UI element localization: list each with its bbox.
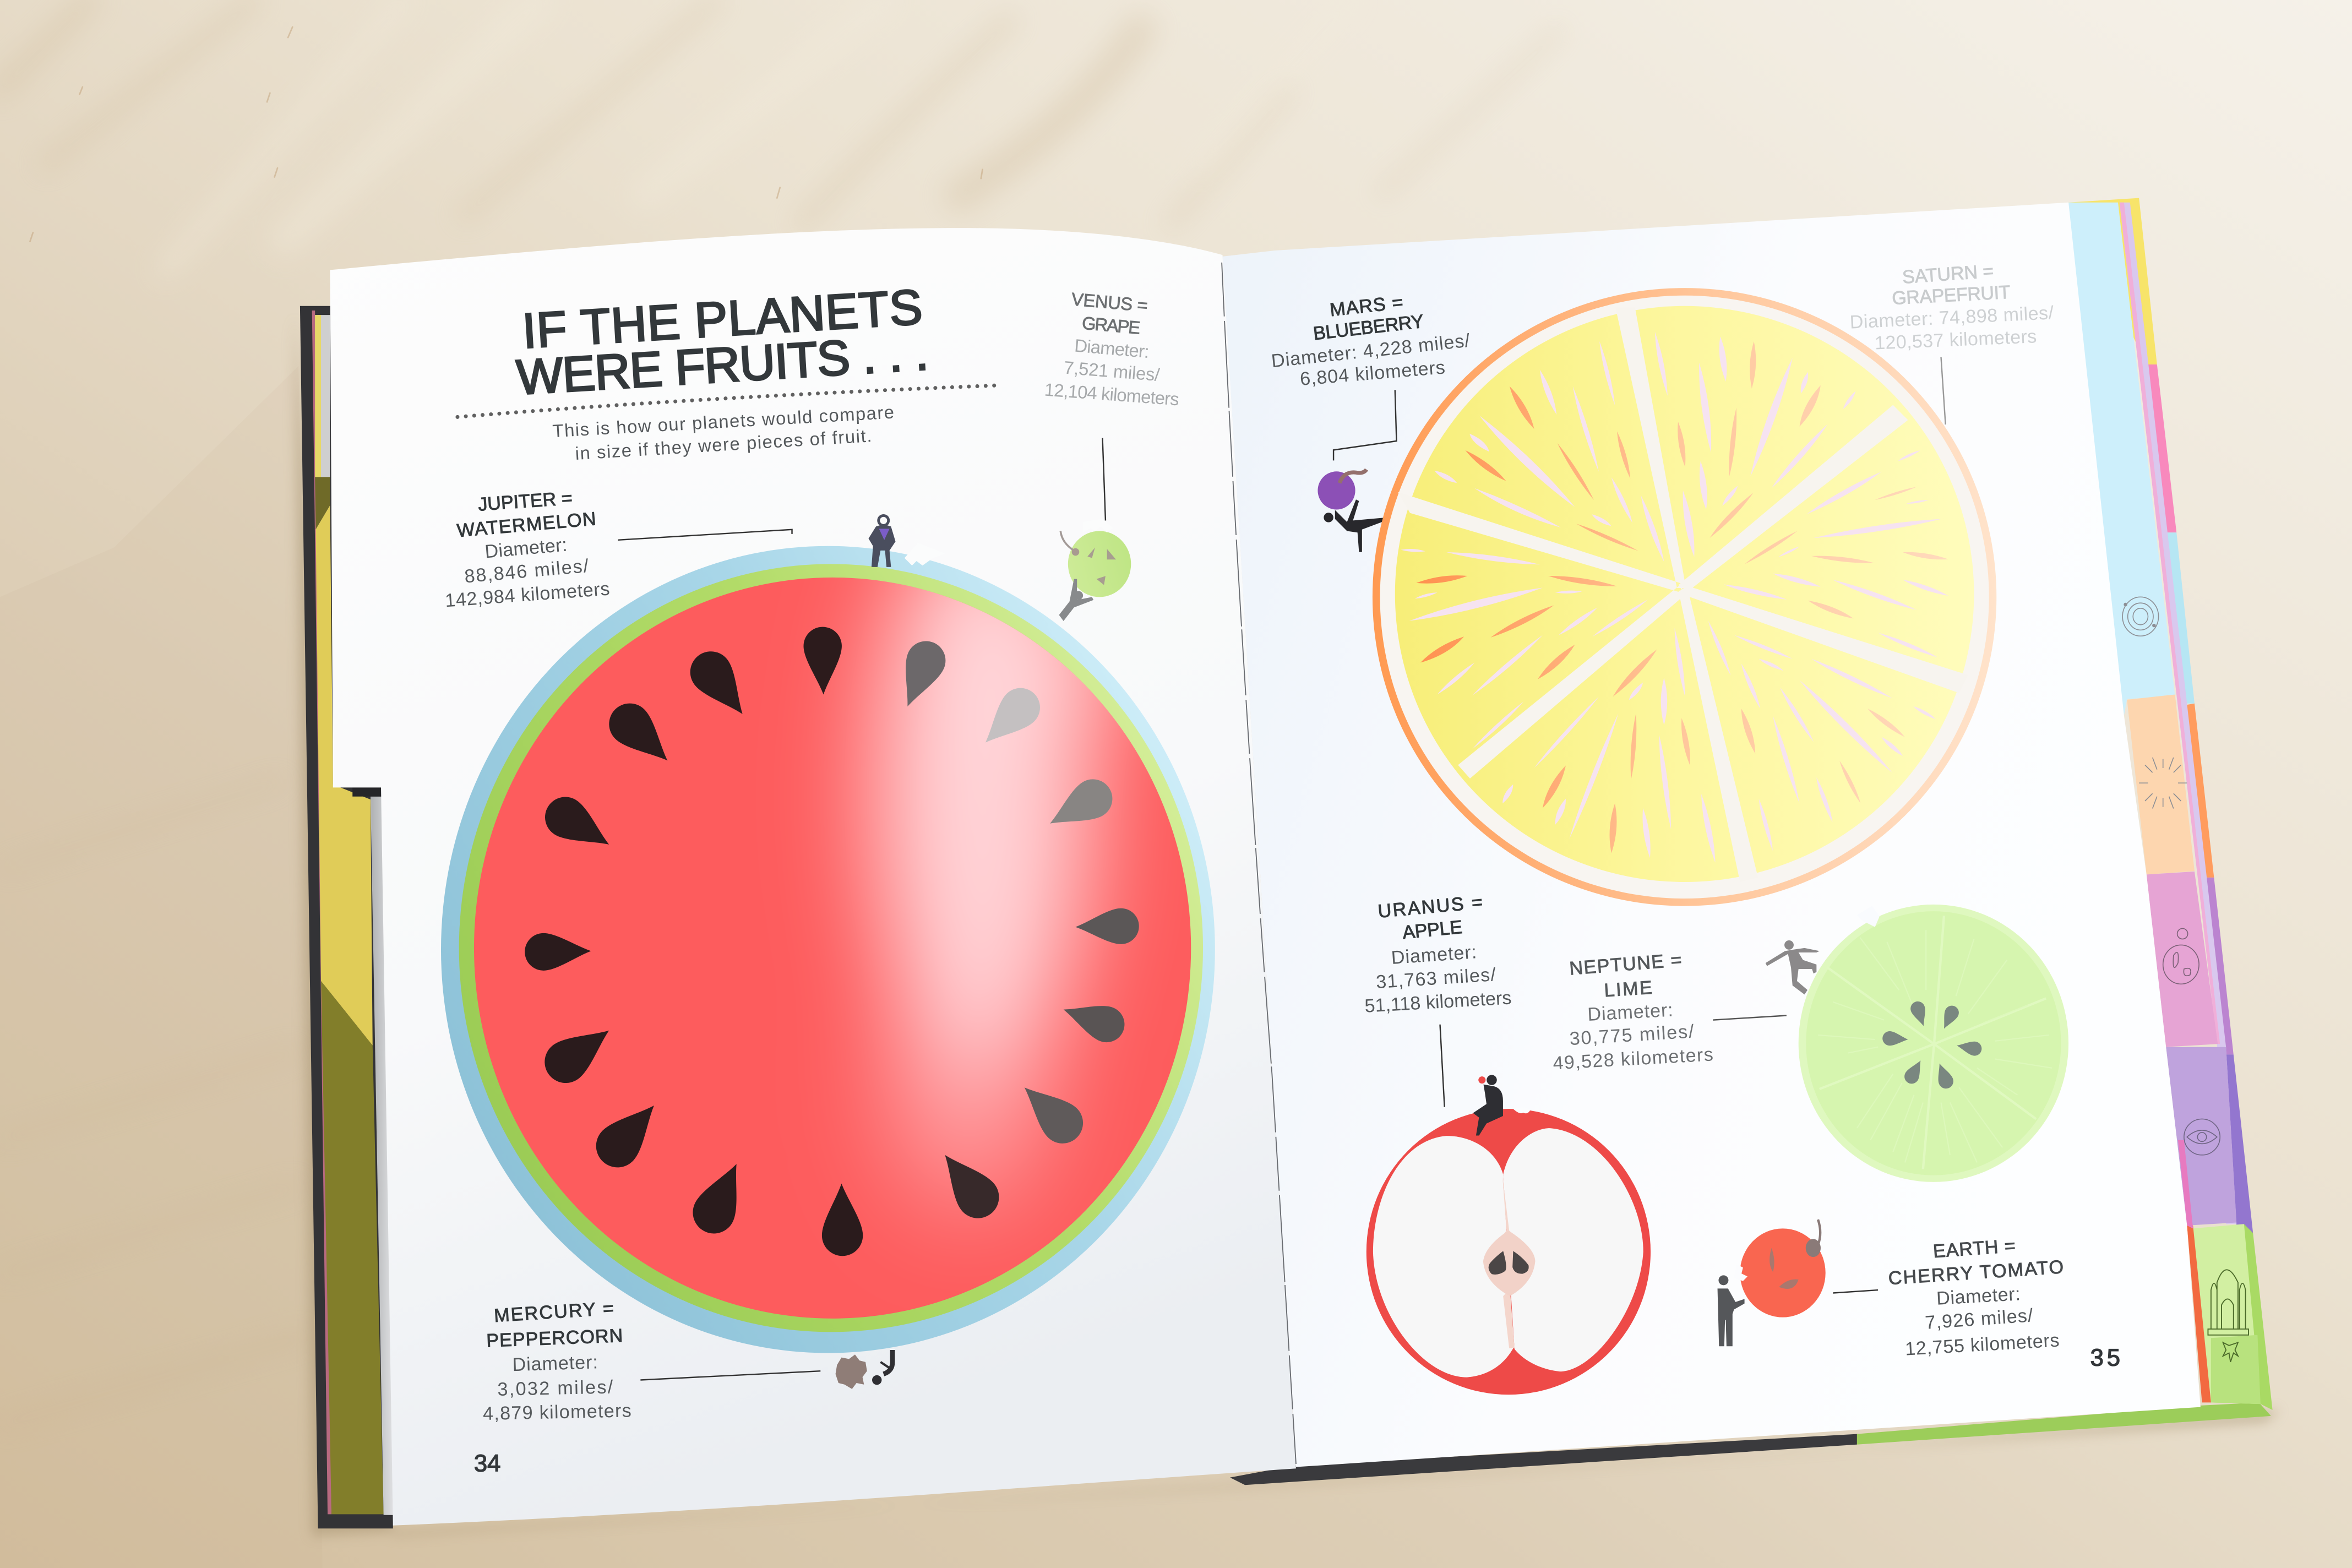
icon: space shuttle rocket [2208,1270,2248,1362]
label: Neptune: NEPTUNE = [1569,950,1683,979]
leader line: Mars [1333,390,1396,460]
tab: solar system blue [2068,203,2175,716]
icon: sun [2139,758,2187,809]
apple flesh left [1373,1136,1513,1378]
diagonal grain upper area [0,0,1560,225]
leader line: Earth [1833,1290,1878,1293]
lime figure [1766,940,1820,994]
tab: rocket green [2178,1140,2261,1404]
label: Saturn [1849,260,2054,354]
cherry tomato: Earth, with figure [1718,1219,1826,1346]
intro text [552,402,895,464]
coloured section tabs on cover edge [2068,198,2273,1410]
watermelon seeds [525,627,1139,1256]
label: Mercury: 3,032 miles/ [497,1376,613,1400]
dotted divider [458,385,994,417]
label: Earth: 7,926 miles/ [1924,1305,2034,1333]
leader line: Neptune [1713,1015,1787,1020]
person on watermelon [868,515,896,567]
book cover and inner pages, left edge [300,306,393,1528]
tab: earth mauve [2147,872,2218,1047]
label: Neptune: 49,528 kilometers [1553,1044,1714,1074]
label: Jupiter: JUPITER = [477,488,573,515]
peppercorn: Mercury, with figure [836,1350,892,1389]
title [515,280,930,406]
wood shaded lower-left area [0,366,323,1568]
label: Earth: 12,755 kilometers [1904,1330,2060,1360]
intro text: in size if they were pieces of fruit. [575,425,872,464]
label: Saturn: 120,537 kilometers [1874,326,2037,354]
lime bite [1857,906,1880,927]
label: Neptune: LIME [1603,977,1653,1001]
grapefruit segment dividers [1398,308,1968,882]
icon: earth and moon [2163,928,2199,984]
tab: sun orange [2127,694,2195,874]
label: Venus: Diameter: [1074,335,1150,362]
label: Mercury: PEPPERCORN [486,1325,623,1352]
leader line: Jupiter [618,530,792,540]
label: Uranus [1364,892,1512,1017]
icon: eye [2184,1119,2220,1155]
flesh glare [874,510,1133,1215]
apple figure [1473,1075,1503,1135]
leader line: Saturn [1941,357,1946,424]
label: Jupiter: 88,846 miles/ [464,556,590,587]
apple flesh right [1503,1128,1643,1371]
label: Venus: 12,104 kilometers [1044,379,1180,409]
blueberry: Mars, with climbing figure [1317,470,1386,552]
leader line: Uranus [1440,1025,1445,1107]
book spine stitching [1222,263,1296,1464]
page number 35: 35 [2090,1345,2120,1371]
title: WERE FRUITS . . . [515,325,930,406]
book shadow [294,315,2280,1536]
label: Neptune: 30,775 miles/ [1569,1021,1695,1049]
label: Venus [1044,288,1180,409]
label: Earth: EARTH = [1932,1235,2016,1262]
grapefruit: Saturn [1373,288,1996,906]
right page [1222,203,2201,1467]
intro text: This is how our planets would compare [552,402,895,441]
label: Mercury: 4,879 kilometers [483,1400,631,1424]
label: Uranus: APPLE [1402,917,1463,943]
label: Venus: VENUS = [1071,288,1148,315]
label: Uranus: Diameter: [1391,941,1477,968]
label: Saturn: SATURN = [1902,260,1994,288]
left page [330,228,1296,1526]
title: IF THE PLANETS [521,280,924,359]
pulp streaks [1401,332,1948,863]
bite in rind [905,543,945,565]
label: Venus: 7,521 miles/ [1063,357,1161,385]
watermelon: Jupiter [441,510,1215,1353]
page number 34: 34 [474,1451,500,1477]
label: Jupiter: 142,984 kilometers [444,578,611,611]
label: Mercury: Diameter: [512,1352,598,1375]
leader line: Mercury [640,1371,820,1380]
label: Mars: 6,804 kilometers [1299,357,1446,390]
label: Neptune: Diameter: [1587,1000,1674,1025]
orange pulp [1416,341,1948,853]
label: Neptune [1553,950,1714,1074]
label: Earth [1888,1235,2064,1360]
label: Mercury: MERCURY = [493,1298,614,1326]
label: Uranus: 51,118 kilometers [1364,987,1512,1017]
label: Saturn: GRAPEFRUIT [1891,282,2011,309]
tab: eye purple [2166,1047,2236,1226]
label: Uranus: 31,763 miles/ [1375,964,1497,993]
lime spokes and rays [1820,916,2046,1169]
label: Mars: MARS = [1329,292,1404,320]
label: Earth: CHERRY TOMATO [1888,1256,2064,1289]
lime: Neptune [1766,905,2068,1182]
leader line: Venus [1102,438,1106,520]
label: Mars: Diameter: 4,228 miles/ [1270,330,1471,372]
lime seeds [1882,999,1983,1091]
icon: solar system [2122,597,2159,636]
cover bottom strip, dark and green [1230,1402,2271,1485]
wood knots [30,27,983,242]
label: Jupiter: Diameter: [484,535,568,562]
label: Jupiter: WATERMELON [456,508,597,541]
apple: Uranus [1366,1075,1651,1395]
apple core [1483,1177,1535,1348]
label: Jupiter [444,488,611,611]
label: Uranus: URANUS = [1377,892,1483,922]
label: Venus: GRAPE [1081,313,1141,338]
lower-left near-horizontal grain [0,780,308,1425]
grape: Venus, with figure [1059,519,1131,621]
pink pulp [1401,332,1948,863]
label: Mars [1270,292,1471,390]
label: Mars: BLUEBERRY [1312,311,1425,344]
label: Earth: Diameter: [1936,1283,2021,1309]
label: Saturn: Diameter: 74,898 miles/ [1849,302,2054,333]
label: Mercury [483,1298,631,1424]
